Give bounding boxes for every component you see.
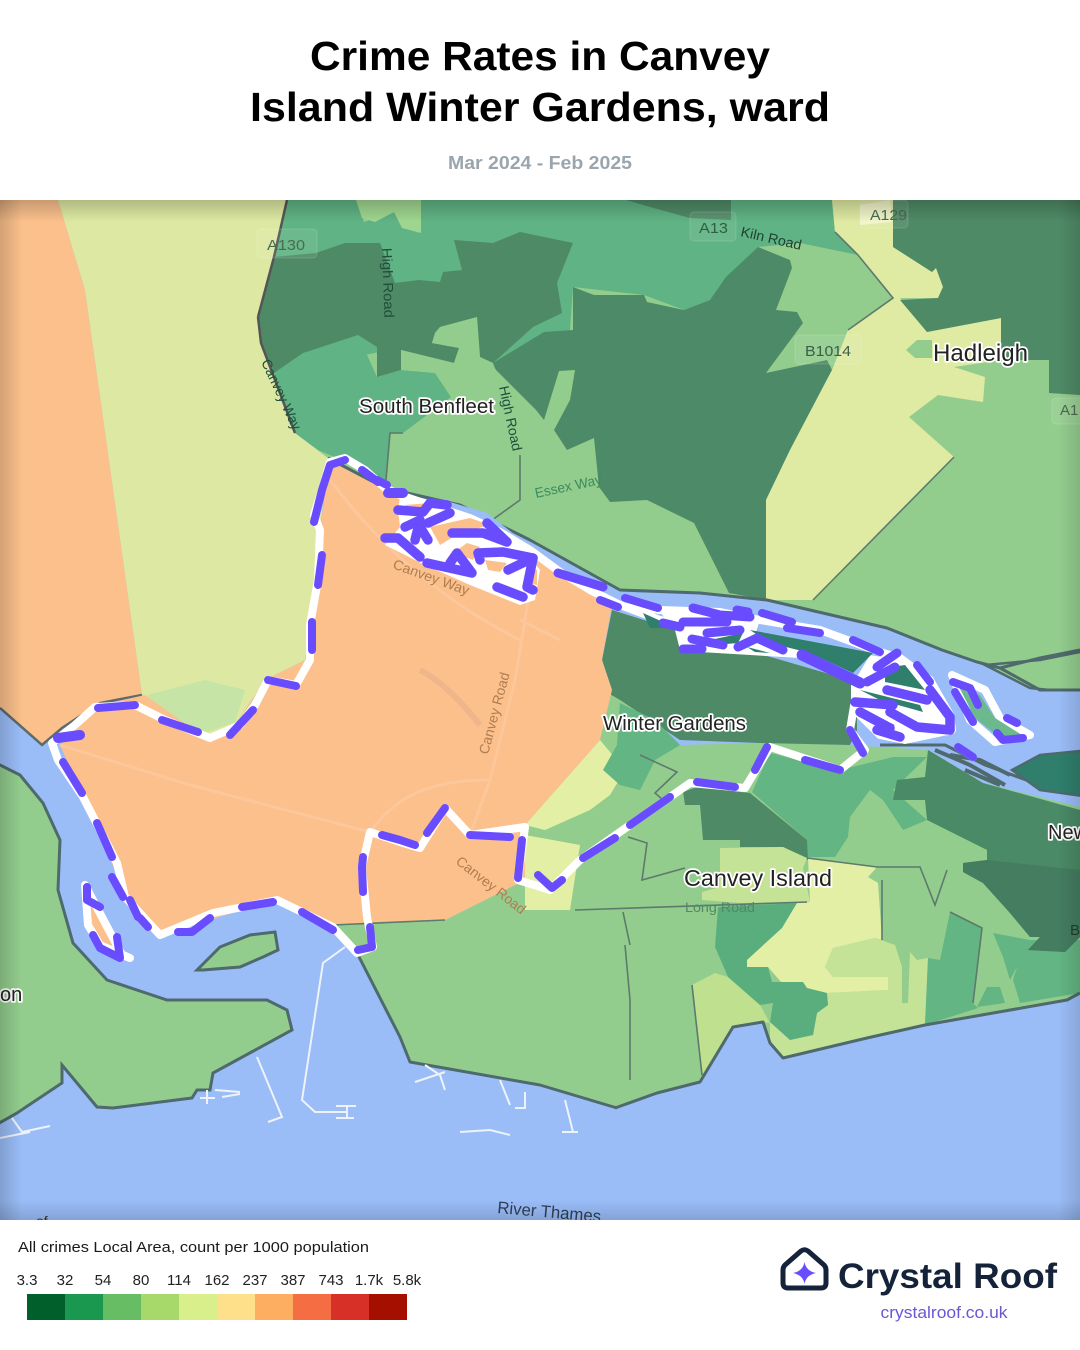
zone: dark central — [493, 247, 832, 600]
zone: medium green south east 1 — [925, 912, 982, 1025]
zone: light yellow-green block — [702, 847, 810, 903]
legend title: All crimes Local Area, count per 1000 population — [18, 1239, 369, 1256]
legend — [17, 1239, 422, 1320]
road label: clipped name: of — [36, 1213, 48, 1229]
zone: medium by Winter Gardens — [603, 703, 680, 790]
road label: Canvey Road south: Canvey Road — [453, 853, 529, 917]
zone: far west orange — [0, 200, 142, 745]
zone: pale notch — [356, 200, 421, 233]
zone: dark top strip — [626, 200, 731, 220]
marsh: teal patches — [643, 613, 925, 730]
map edge vignette — [0, 200, 1080, 1220]
marsh: south east channels — [935, 750, 1010, 785]
ward boundary: white interior fill north — [385, 497, 955, 740]
legend tick labels: 162 — [204, 1272, 230, 1289]
shield: A130: A130 — [267, 237, 305, 254]
zone: yellow-green hadleigh — [766, 200, 1001, 600]
land: small orange islet — [85, 900, 122, 958]
road label: High Road south: High Road — [496, 384, 525, 452]
zone: canvey medium west — [612, 704, 680, 790]
place labels — [0, 340, 1080, 1006]
land: ward Canvey Island orange — [60, 458, 612, 935]
road: grey wisp — [420, 670, 480, 725]
legend tick labels: 387 — [280, 1272, 306, 1289]
zone: green patch at Hadleigh — [906, 340, 932, 358]
shield: B1014: B1014 — [805, 343, 851, 360]
legend tick labels: 80 — [133, 1272, 149, 1289]
place: Canvey Island: Canvey Island — [684, 865, 832, 891]
zone: light notch at High Road — [401, 317, 496, 397]
road label: Essex Way: Essex Way — [533, 471, 603, 501]
website url: crystalroof.co.uk — [880, 1304, 1008, 1322]
marsh: pale green by Benfleet Creek — [147, 680, 245, 733]
land: Canvey Island east base — [333, 690, 1080, 1108]
zone: small pale green block by A129 — [860, 200, 892, 225]
ward boundary: orange holes — [405, 503, 537, 585]
footer background — [0, 1220, 1080, 1350]
title: Island Winter Gardens, ward — [250, 84, 830, 130]
shoreline: far west — [0, 695, 142, 745]
title: Crime Rates in Canvey — [310, 33, 770, 79]
legend tick labels: 237 — [242, 1272, 268, 1289]
logo: Crystal Roof — [783, 1250, 1057, 1322]
title — [250, 33, 830, 130]
date range subtitle: Mar 2024 - Feb 2025 — [448, 153, 632, 173]
land: river island — [197, 932, 278, 970]
road label: Long Road: Long Road — [685, 899, 755, 915]
coastlines — [328, 458, 1080, 1108]
legend tick labels: 743 — [318, 1272, 344, 1289]
zone: medium green south east 2 — [993, 933, 1080, 1003]
roads on ward — [60, 480, 560, 835]
zone: light green south central — [770, 938, 928, 1058]
road label: Canvey Way north: Canvey Way — [258, 357, 305, 432]
land: north-east strip — [985, 650, 1080, 690]
shield: A1 clipped: A1 — [1060, 402, 1078, 419]
shield: A13: A13 — [699, 220, 728, 237]
road labels — [36, 223, 803, 1229]
zone: medium green north — [258, 200, 858, 373]
wordmark: Crystal Roof — [838, 1257, 1057, 1296]
zone: pale yellow south of route — [525, 835, 580, 910]
zone: medium green south — [715, 903, 828, 1040]
road label: Kiln Road: Kiln Road — [739, 223, 803, 253]
shield: B clipped: B — [1070, 922, 1080, 939]
zone: light green south west — [692, 973, 770, 1075]
district outlines north — [258, 200, 954, 600]
legend tick labels: 1.7k — [355, 1272, 384, 1289]
legend tick labels: 3.3 — [17, 1272, 37, 1289]
shield: A1 clipped — [1052, 398, 1080, 424]
place: Winter Gardens: Winter Gardens — [603, 713, 746, 735]
road label: Canvey Road vertical: Canvey Road — [475, 670, 513, 756]
road label: Canvey Way ward: Canvey Way — [391, 556, 472, 598]
zone: dark band — [683, 787, 808, 860]
road label: High Road north: High Road — [379, 248, 397, 318]
zone: dark east — [893, 750, 1080, 952]
place: on clipped: on — [0, 984, 22, 1006]
zone: darker east strip — [963, 860, 1080, 952]
shield: A130 — [257, 229, 317, 258]
marsh: south east teal island — [1012, 750, 1080, 797]
legend tick labels: 114 — [167, 1272, 191, 1289]
zone: medium green coast patch — [977, 987, 1005, 1007]
zone: Winter Gardens dark — [602, 610, 857, 745]
zone: dark north-west — [258, 232, 573, 377]
zone: medium green along creek — [752, 753, 927, 857]
zone: pale yellow by ward — [525, 740, 625, 830]
land: west mainland light band — [58, 200, 328, 738]
marsh: east island — [958, 685, 1022, 738]
icon: house with star — [783, 1250, 826, 1288]
shield: A129 — [860, 200, 908, 228]
shield: A129: A129 — [870, 207, 907, 224]
zone: south benfleet medium — [274, 354, 451, 480]
water: River Thames — [0, 200, 1080, 1220]
zone: pale yellow central — [747, 858, 888, 993]
legend colour scale — [27, 1294, 407, 1320]
legend tick labels: 54 — [95, 1272, 111, 1289]
ward boundary: purple dashes — [58, 460, 1023, 958]
legend tick labels: 32 — [57, 1272, 73, 1289]
zone: dark north-east — [893, 200, 1080, 395]
shield: B1014 — [795, 335, 861, 364]
legend tick labels: 5.8k — [393, 1272, 422, 1289]
ward boundary: white outline — [52, 458, 1030, 958]
place: South Benfleet: South Benfleet — [359, 396, 494, 418]
shield: A13 — [690, 212, 736, 241]
water: inlet north of ward — [450, 502, 537, 552]
land: south west mainland — [0, 762, 292, 1126]
place: Hadleigh: Hadleigh — [933, 340, 1028, 367]
map: crime choropleth — [0, 200, 1080, 1229]
road shields — [257, 200, 1080, 939]
district outlines south — [333, 755, 982, 1080]
land: north mainland base — [258, 200, 1080, 668]
road label: River Thames: River Thames — [497, 1198, 602, 1226]
legend tick labels — [17, 1272, 422, 1289]
piers and jetties — [0, 947, 578, 1138]
